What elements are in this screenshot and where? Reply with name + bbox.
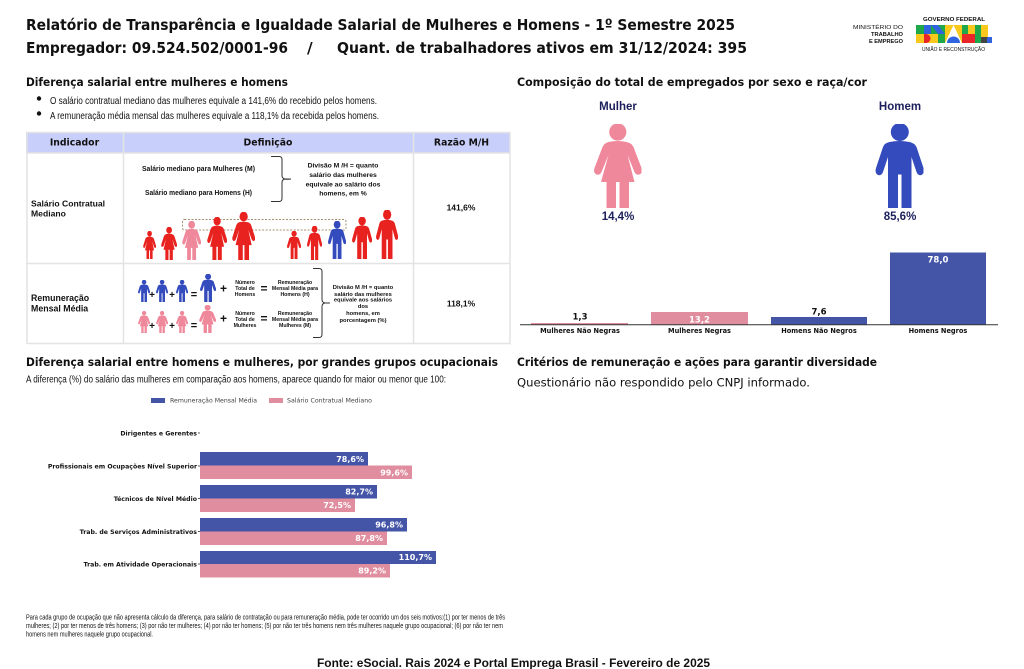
definition: divisão remuneração: homens, em [346, 311, 380, 317]
pictogram: mulher [594, 101, 642, 223]
definition: salário mediano: Salário mediano para Homens (H) [145, 188, 253, 197]
row label: remuneração mensal média [31, 293, 90, 314]
pictogram: remuneração homens: = [191, 289, 197, 301]
heading: diferença salarial: Diferença salarial entre mulheres e homens [26, 75, 288, 89]
pictogram: remuneração mulheres: Mulheres (M) [279, 323, 311, 329]
definition: divisão remuneração: porcentagem (%) [339, 318, 387, 324]
group: atividade operacionais: 89,2% [358, 566, 386, 576]
logo: ministério e governo federal: UNIÃO E RECONSTRUÇÃO [922, 46, 986, 53]
logo: ministério e governo federal: E EMPREGO [869, 39, 904, 45]
table header: Definição [244, 138, 292, 148]
pictogram: remuneração mulheres: = [191, 320, 197, 332]
title: / [307, 39, 313, 57]
group: atividade operacionais: Trab. em Atividade Operacionais [84, 562, 197, 568]
pictogram: homem [876, 101, 924, 223]
title: Quant. de trabalhadores ativos em 31/12/2024: 395 [337, 39, 747, 57]
pictogram: remuneração homens: Total de [235, 286, 255, 292]
definition: salário mediano: homens, em % [319, 190, 367, 198]
bar: mulheres não negras [531, 312, 628, 335]
bar: homens negros [890, 252, 986, 335]
definition: salário mediano: Salário mediano para Mulheres (M) [142, 164, 256, 173]
bullet list [37, 96, 379, 122]
definition: divisão remuneração: salário das mulheres [334, 292, 392, 298]
value: razão remuneração: 118,1% [447, 298, 476, 308]
pictogram: remuneração mulheres: + [220, 312, 227, 326]
pictogram: mulher: 14,4% [602, 211, 634, 223]
definition: divisão remuneração: equivale aos salários [334, 298, 392, 304]
pictogram: remuneração mulheres: Total de [235, 317, 255, 323]
pictogram: remuneração homens: Homens (H) [280, 292, 310, 298]
title: Empregador: 09.524.502/0001-96 [26, 39, 288, 57]
logo: ministério e governo federal: GOVERNO FEDERAL [923, 17, 986, 23]
group: dirigentes e gerentes: Dirigentes e Gerentes [120, 430, 197, 438]
group: profissionais nível superior [48, 452, 412, 479]
group: técnicos nível médio [114, 485, 377, 512]
title: Relatório de Transparência e Igualdade Salarial de Mulheres e Homens - 1º Semestre 2025 [26, 16, 735, 34]
footnote: Para cada grupo de ocupação que não apresenta cálculo da diferença, para salário de contratação ou para remuneração média, pode ter ocorrido um dos seis motivos:(1) por ter menos de três [26, 614, 505, 622]
row label: remuneração mensal média: Mensal Média [31, 304, 88, 314]
bar: mulheres não negras: 1,3 [572, 312, 588, 322]
table: indicadores [26, 132, 510, 344]
definition: divisão remuneração: Divisão M /H = quanto [333, 285, 394, 291]
heading: diferença por grupos: Diferença salarial entre homens e mulheres, por grandes grupos ocupacionais [26, 355, 498, 369]
pictogram: homem: 85,6% [884, 211, 916, 223]
group: profissionais nível superior: 78,6% [336, 455, 364, 464]
pictogram: remuneração homens: + [149, 290, 155, 301]
pictogram: remuneração mulheres [138, 305, 318, 333]
group: técnicos nível médio: 82,7% [345, 488, 373, 496]
text: explicação: A diferença (%) do salário das mulheres em comparação aos homens, aparece quando for maior ou menor que 100: [26, 374, 446, 386]
pictogram: remuneração homens: Remuneração [278, 280, 312, 286]
pictogram: remuneração mulheres: Remuneração [278, 311, 312, 317]
logo: ministério e governo federal: TRABALHO [871, 32, 904, 38]
table header: Razão M/H [434, 138, 489, 148]
group: técnicos nível médio: Técnicos de Nível Médio [114, 495, 197, 503]
pictogram: remuneração homens: + [220, 282, 227, 296]
pictogram: remuneração homens: = [260, 282, 268, 296]
text: questionário: Questionário não respondido pelo CNPJ informado. [517, 376, 810, 390]
bar: mulheres negras [651, 312, 748, 335]
group: serviços administrativos: 96,8% [375, 520, 403, 530]
value: razão salário contratual: 141,6% [447, 202, 476, 212]
bar: mulheres negras: Mulheres Negras [668, 327, 731, 335]
logo: ministério e governo federal [853, 17, 992, 53]
bar: mulheres negras: 13,2 [689, 316, 710, 326]
footnote: homens nem mulheres naquele grupo ocupacional. [26, 632, 153, 638]
heading: critérios: Critérios de remuneração e ações para garantir diversidade [517, 355, 877, 369]
bar: homens negros: Homens Negros [909, 327, 967, 335]
pictogram: remuneração homens: Homens [235, 292, 255, 298]
legend: Remuneração Mensal Média [170, 396, 257, 404]
pictogram: remuneração mulheres: Mensal Média para [272, 317, 318, 323]
table header: Indicador [50, 138, 100, 148]
footnote [26, 614, 505, 638]
pictogram: remuneração homens [138, 274, 318, 302]
row label: salário contratual mediano: Salário Contratual [31, 198, 105, 208]
group: profissionais nível superior: 99,6% [380, 468, 408, 478]
bar: mulheres não negras: Mulheres Não Negras [540, 327, 620, 335]
table header [50, 138, 489, 148]
bullet list: O salário contratual mediano das mulheres equivale a 141,6% do recebido pelos homens. [50, 96, 377, 107]
pictogram: remuneração homens: Mensal Média para [272, 286, 318, 292]
pictogram: mulher: Mulher [599, 101, 637, 113]
group: serviços administrativos: Trab. de Serviços Administrativos [80, 529, 197, 536]
bar chart: grupos ocupacionais [48, 430, 436, 578]
group: serviços administrativos: 87,8% [355, 534, 383, 543]
definition: salário mediano [142, 156, 381, 202]
definition: salário mediano: salário das mulheres [309, 172, 377, 179]
pictogram: remuneração homens: + [169, 290, 175, 301]
group: profissionais nível superior: Profissionais em Ocupações Nível Superior [48, 462, 198, 470]
pictogram: remuneração mulheres: Número [235, 311, 255, 317]
group: serviços administrativos [80, 518, 407, 545]
definition: divisão remuneração [313, 268, 394, 338]
bullet list: A remuneração média mensal das mulheres equivale a 118,1% da recebida pelos homens. [50, 111, 379, 122]
logo: ministério e governo federal: MINISTÉRIO DO [853, 24, 904, 31]
row label: salário contratual mediano: Mediano [31, 208, 66, 218]
bar: homens não negros: Homens Não Negros [781, 327, 857, 335]
bar: homens não negros [771, 308, 867, 335]
row label: remuneração mensal média: Remuneração [31, 293, 90, 303]
pictogram: remuneração mulheres: + [149, 321, 155, 332]
bar chart: composição por raça [520, 252, 998, 335]
definition: salário mediano: equivale ao salário dos [306, 182, 381, 188]
row label: salário contratual mediano [31, 198, 105, 218]
footnote: mulheres; (2) por ter menos de três homens; (3) por não ter mulheres; (4) por não ter homens; (5) por não ter três homens nem três mulheres naquele grupo ocupacional; (6) por não ter nem [26, 623, 503, 630]
pictogram: remuneração mulheres: Mulheres [234, 323, 256, 329]
pictogram: salário mediano people [143, 209, 398, 260]
pictogram: remuneração mulheres: + [169, 321, 175, 332]
pictogram: remuneração homens: Número [235, 280, 255, 286]
heading: composição: Composição do total de empregados por sexo e raça/cor [517, 75, 867, 89]
definition: divisão remuneração: dos [358, 304, 368, 310]
group: técnicos nível médio: 72,5% [323, 501, 351, 510]
group: atividade operacionais: 110,7% [399, 553, 432, 562]
definition: salário mediano: Divisão M /H = quanto [308, 162, 378, 170]
legend [151, 396, 372, 404]
bar: homens negros: 78,0 [928, 256, 949, 266]
bar: homens não negros: 7,6 [811, 308, 827, 318]
legend: Salário Contratual Mediano [287, 396, 372, 404]
title [26, 16, 747, 57]
group: atividade operacionais [84, 551, 436, 578]
pictogram: homem: Homem [879, 101, 921, 113]
pictogram: remuneração mulheres: = [260, 312, 268, 326]
